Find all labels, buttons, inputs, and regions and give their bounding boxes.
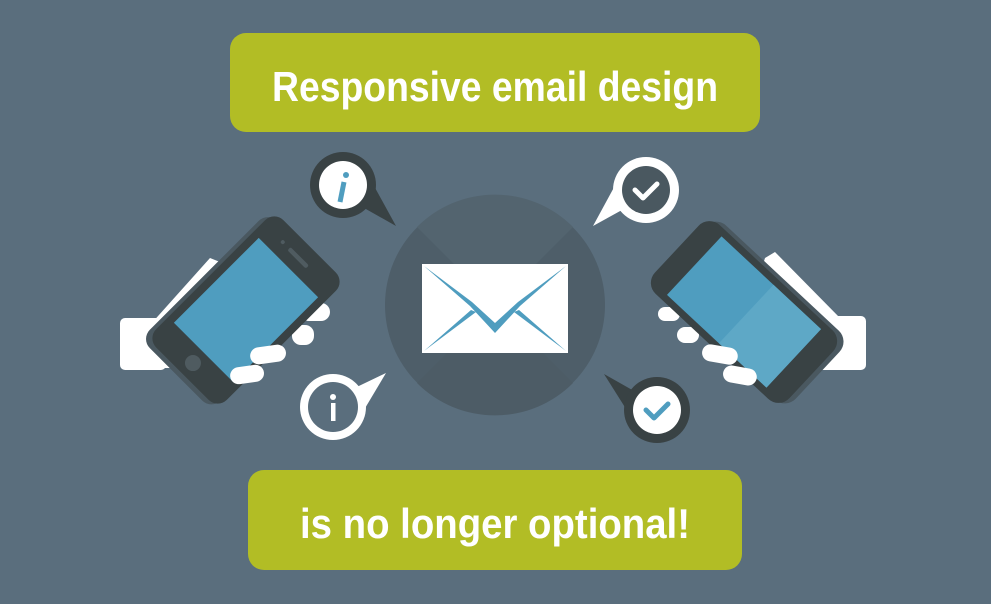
phone xyxy=(141,208,345,413)
title banner: Responsive email design xyxy=(272,63,718,110)
bottom banner: is no longer optional! xyxy=(300,500,690,547)
hand: fingers over phone xyxy=(229,344,287,385)
central circle with envelope xyxy=(385,195,605,415)
title banner xyxy=(230,33,760,132)
bubble: info white ring (bottom left) xyxy=(300,373,386,440)
bubble: info dark (top left) xyxy=(310,152,396,226)
bottom banner xyxy=(248,470,742,570)
icon: envelope xyxy=(422,264,568,353)
right phone with hand xyxy=(645,212,866,413)
bubble: check dark (bottom right) xyxy=(604,374,690,443)
left phone with hand xyxy=(120,208,345,413)
bubble: check white ring (top right) xyxy=(593,157,679,226)
hand: arm xyxy=(120,258,330,370)
